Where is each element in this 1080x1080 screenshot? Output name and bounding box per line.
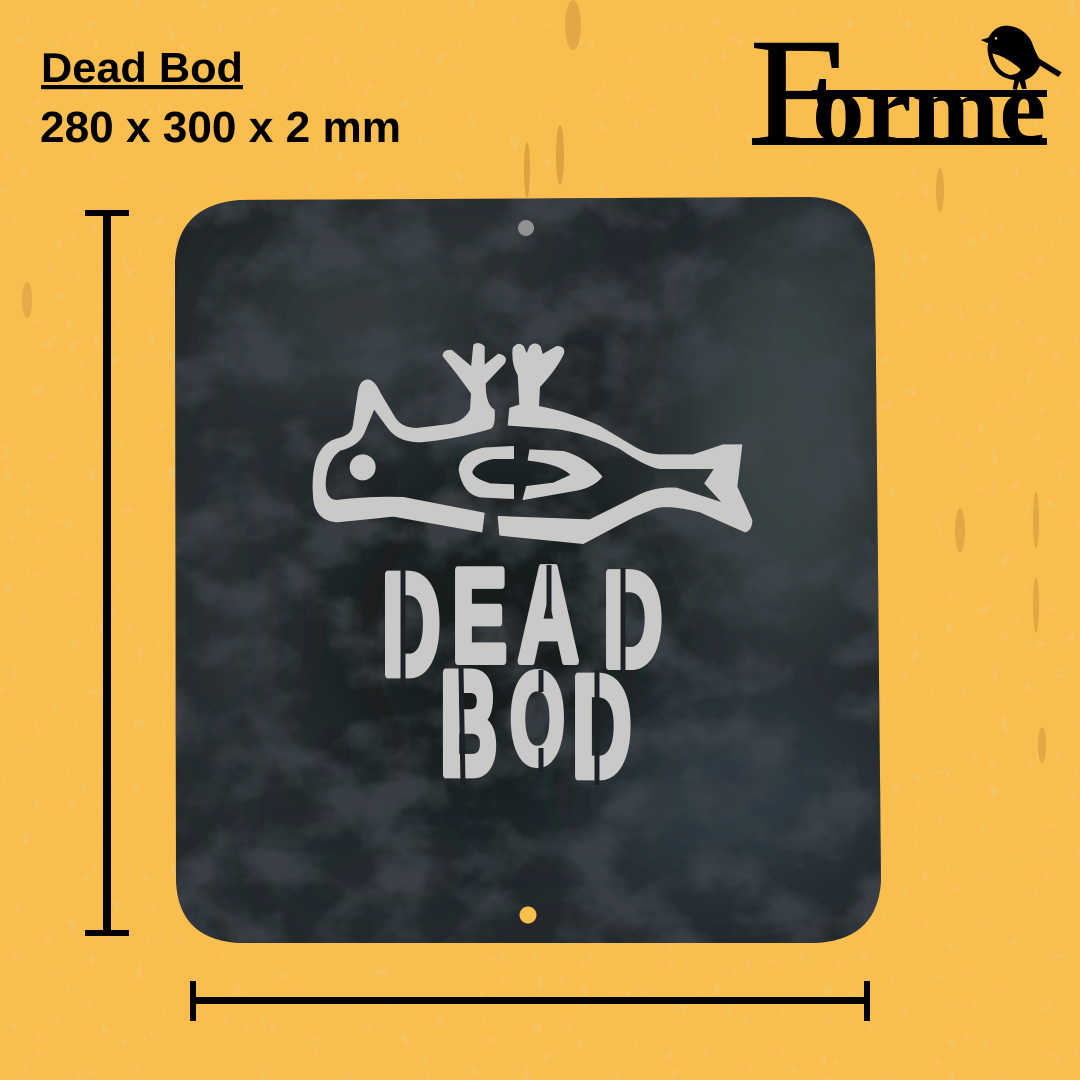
mounting hole: top xyxy=(518,220,534,236)
stencil lettering: DEAD BOD xyxy=(382,539,663,807)
mounting hole: bottom xyxy=(520,906,536,924)
stencil lettering: DEAD BOD: D xyxy=(382,543,440,705)
height dimension line xyxy=(85,210,129,936)
stencil bridges xyxy=(403,565,623,785)
stencil lettering: DEAD BOD: D xyxy=(572,646,632,807)
stencil lettering: DEAD BOD: A xyxy=(518,539,579,690)
logo: Forme with bird: F xyxy=(750,8,844,176)
stencil lettering: DEAD BOD: B xyxy=(440,642,497,806)
icon: robin bird xyxy=(981,26,1062,90)
title: Dead Bod: Dead Bod xyxy=(41,44,243,91)
dimensions text: 280 x 300 x 2 mm xyxy=(40,103,401,152)
stencil lettering: DEAD BOD: E xyxy=(452,542,507,690)
stencil lettering: DEAD BOD: D xyxy=(603,544,663,695)
stencil lettering: DEAD BOD: O xyxy=(510,648,565,792)
logo: Forme with bird xyxy=(752,26,1062,145)
dead bird cut-out xyxy=(313,344,752,543)
width dimension line xyxy=(190,981,870,1021)
panel: metal sign plate xyxy=(170,190,890,950)
logo: Forme with bird: orme xyxy=(812,52,1046,163)
